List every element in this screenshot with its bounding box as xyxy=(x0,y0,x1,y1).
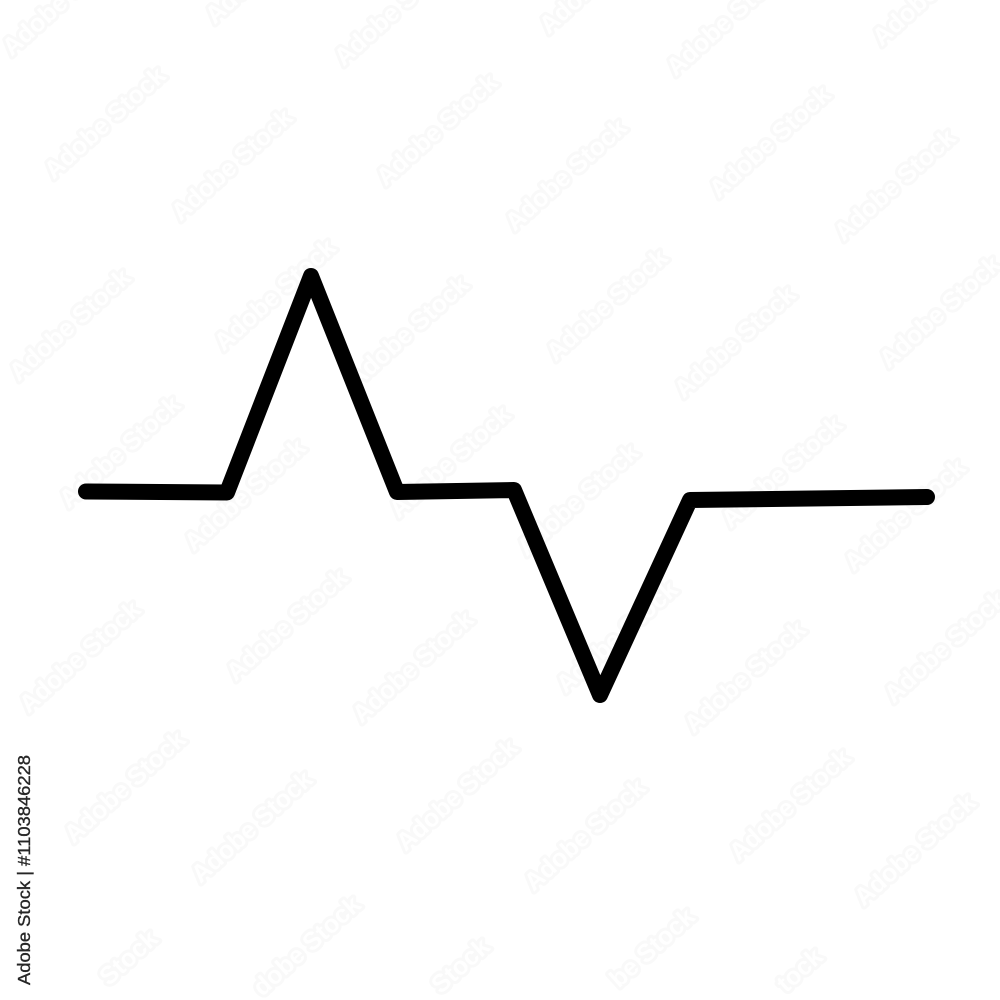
watermark pattern: tock xyxy=(771,943,828,998)
watermark pattern: Adobe Stock xyxy=(39,61,171,185)
watermark pattern: Adobe Stock xyxy=(14,595,146,719)
watermark pattern: Adobe Stock xyxy=(849,788,981,912)
watermark pattern: Adobe Stock xyxy=(4,263,136,387)
icon: pulse line xyxy=(86,276,927,695)
watermark pattern: Adobe Stock xyxy=(500,113,632,237)
watermark pattern: Adobe Stock xyxy=(186,765,318,889)
watermark pattern: Stock xyxy=(94,925,163,991)
watermark pattern: Adobe Stock xyxy=(839,453,971,577)
watermark pattern: Adobe Stock xyxy=(166,103,298,227)
watermark pattern: Stock xyxy=(426,933,495,999)
watermark pattern: Adobe Stock xyxy=(391,733,523,857)
stock image credit: Adobe Stock | #1103846228 xyxy=(14,755,34,985)
watermark pattern: Adobe Stock xyxy=(347,605,479,729)
watermark pattern: Adobe Stock xyxy=(342,270,474,394)
watermark pattern: Adobe Stock xyxy=(679,615,811,739)
watermark pattern: Adobe Stock xyxy=(724,743,856,867)
watermark pattern: Adobe Stock xyxy=(669,280,801,404)
watermark pattern: Adobe Stock xyxy=(384,400,516,524)
watermark pattern: Adobe Stock xyxy=(59,725,191,849)
watermark pattern: Adobe Stock xyxy=(829,123,961,247)
watermark pattern: Adobe Stock xyxy=(551,575,683,699)
watermark pattern: Adobe Stock xyxy=(209,233,341,357)
watermark pattern: be Stock xyxy=(604,903,700,993)
watermark pattern: Adobe Stock xyxy=(179,433,311,557)
watermark pattern: Adobe Stock xyxy=(541,243,673,367)
watermark pattern: Adobe Stock xyxy=(716,410,848,534)
watermark pattern: Adobe Stock xyxy=(54,390,186,514)
watermark pattern: Adobe Stock xyxy=(512,438,644,562)
watermark pattern: dobe Stock xyxy=(247,891,366,1000)
watermark pattern: Adobe Stock xyxy=(221,563,353,687)
watermark pattern: Adobe Stock xyxy=(371,68,503,192)
watermark pattern: Adobe Stock xyxy=(519,773,651,897)
watermark pattern: Adobe Stock xyxy=(704,80,836,204)
